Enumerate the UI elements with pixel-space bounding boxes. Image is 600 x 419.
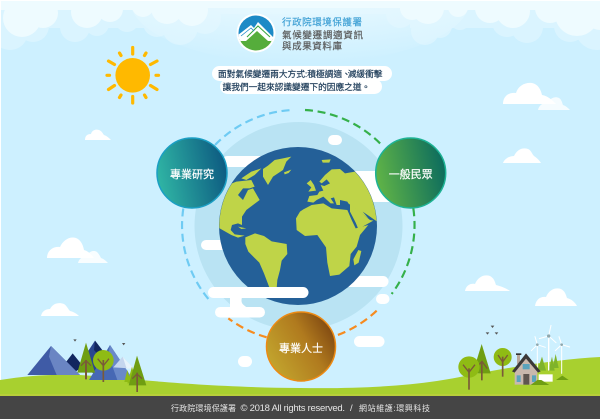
node: 專業研究: 專業研究 [170, 167, 214, 181]
mountain: tall dark [80, 341, 115, 378]
node: 一般民眾: 一般民眾 [389, 168, 433, 181]
cloud: left middle large [47, 237, 94, 258]
cloud: left lower [41, 303, 79, 316]
footer bar: 網站維護:環興科技 [359, 403, 430, 413]
intro text pills [212, 66, 392, 94]
globe [215, 147, 387, 305]
heading: agency name: 行政院環境保護署 [282, 16, 362, 28]
continent: Arabia [350, 204, 373, 229]
node: 專業人士 [266, 312, 336, 381]
heading: site title: 氣候變遷調適資訊 [282, 30, 363, 42]
cloud: upper right large [503, 83, 556, 104]
logo [236, 14, 276, 52]
tree: pine right [129, 356, 146, 392]
heading: site title: 與成果資料庫 [282, 40, 342, 52]
node: 專業研究 [157, 138, 227, 208]
continent: Africa [296, 203, 368, 276]
continent: North America [215, 180, 260, 238]
continent: Iceland [322, 159, 331, 163]
tree: pine left [77, 343, 95, 379]
continent: Cuba [238, 227, 246, 229]
tree: pine [473, 344, 491, 380]
heading: site title [282, 30, 363, 52]
cloud: upper right small [538, 97, 570, 110]
tree: round [93, 350, 114, 382]
tree: round left [458, 356, 480, 390]
icon: sun [107, 48, 158, 103]
wind turbines [531, 325, 570, 373]
intro text pills: 讓我們一起來認識變遷下的因應之道。 [222, 81, 370, 92]
continent: Eurasia [307, 169, 376, 222]
node: 一般民眾 [376, 138, 446, 208]
footer bar [0, 396, 600, 419]
tree: round right [494, 348, 512, 377]
footer bar: / [350, 403, 353, 414]
dashed ring [182, 110, 415, 337]
intro text pills: 面對氣候變遷兩大方式:積極調適、減緩衝擊 [218, 68, 383, 79]
birds [486, 326, 498, 335]
white cloud bars in front of globe [208, 287, 390, 367]
bush [531, 380, 549, 385]
continent: Greenland [263, 157, 291, 185]
fence [539, 374, 553, 382]
cloud: left middle small [78, 251, 108, 263]
mountain: right [89, 345, 133, 380]
cloud: right lower small [465, 275, 510, 291]
mountain: back dark [65, 353, 83, 375]
mountain: snowy peak [113, 357, 134, 369]
mountain: left [27, 346, 80, 375]
mountain: left light face [49, 346, 80, 375]
ground highlight line [0, 394, 600, 396]
pale halo circle behind globe [194, 122, 402, 330]
cloud: right lower large [535, 288, 577, 306]
scene: house, trees and wind turbines [458, 325, 570, 390]
white cloud bars behind globe [201, 135, 392, 287]
birds [73, 339, 125, 345]
footer bar: 行政院環境保護署 [171, 403, 236, 413]
small cloud: upper left [85, 130, 111, 140]
continent: British Isles [307, 180, 316, 192]
scene: mountains and trees [27, 339, 146, 392]
ground hills [0, 357, 600, 396]
continent: Madagascar [353, 250, 361, 265]
cloud: right middle [503, 148, 541, 163]
tree: small pine [124, 367, 137, 383]
continent: South America [245, 233, 287, 288]
house [512, 353, 541, 385]
continent: arctic islands [241, 168, 291, 180]
background bushes [537, 354, 559, 371]
node: 專業人士: 專業人士 [279, 341, 323, 355]
footer bar: © 2018 All rights reserved. [240, 403, 345, 414]
